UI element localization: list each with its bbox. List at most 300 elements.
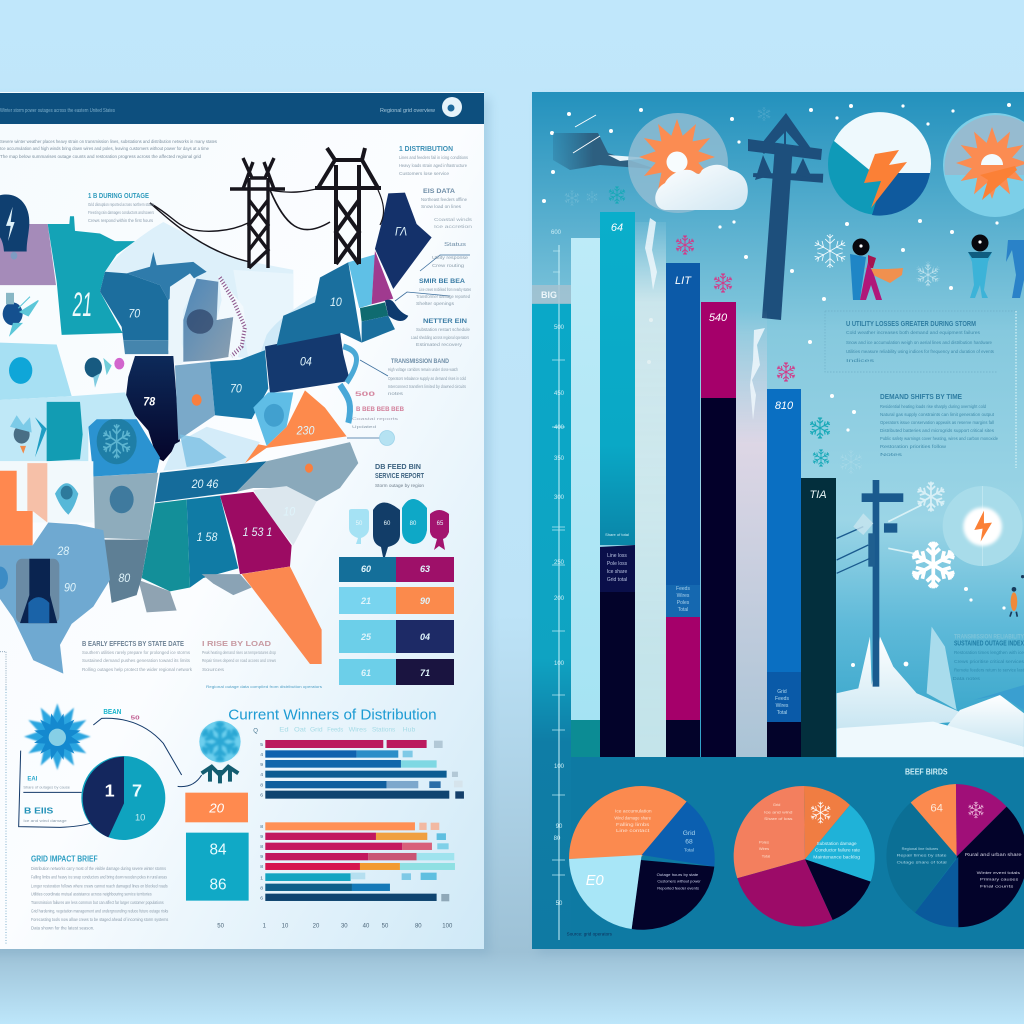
chart: pie one: 68 bbox=[685, 838, 693, 845]
box: teal bbox=[186, 833, 249, 901]
pie side labels: B EIIS bbox=[24, 806, 54, 815]
gap band 2 bbox=[736, 310, 767, 757]
snow texture on Kentucky bbox=[180, 434, 227, 467]
callout: New England notes: Shelter openings bbox=[416, 301, 454, 306]
state: Kentucky bbox=[163, 427, 260, 471]
chart legend row: Feeds bbox=[327, 728, 343, 734]
callout: pink note bbox=[352, 392, 405, 429]
callout: New England notes: Substation restart schedule bbox=[416, 327, 471, 332]
legend heading: DB FEED BIN bbox=[375, 464, 421, 471]
chart: pie: 1 bbox=[105, 781, 115, 801]
chart: pie: 10 bbox=[135, 813, 145, 823]
icon: snowflake large bbox=[910, 542, 957, 588]
chart legend row: Hub bbox=[403, 728, 416, 734]
text block: Florida notes bbox=[202, 641, 277, 672]
legend heading: Storm outage by region bbox=[375, 483, 424, 488]
chart: row markers: 8 bbox=[260, 824, 263, 830]
box: orange bbox=[185, 793, 248, 822]
text block: Gulf notes: Southern utilities rarely prepare for prolonged ice storms bbox=[82, 650, 191, 655]
Minnesota label: 21 bbox=[72, 285, 92, 323]
intro text block: Severe winter weather places heavy strain on transmission lines, substations and distribution networks in many states bbox=[0, 139, 218, 144]
chart: x axis labels: 1 bbox=[263, 923, 267, 929]
text block: Florida notes: I RISE BY LOAD bbox=[202, 641, 271, 648]
intro text block bbox=[0, 139, 218, 159]
box: teal: 86 bbox=[209, 876, 227, 893]
bar 3 bbox=[666, 263, 700, 757]
chart: pie three: Winter event totals bbox=[977, 870, 1020, 875]
icon: lightbulb with bolt bbox=[0, 195, 29, 260]
box: orange: 20 bbox=[208, 801, 225, 816]
pie side labels: EAI bbox=[27, 777, 38, 783]
icon: people group right bbox=[968, 234, 1024, 298]
state: Maine bbox=[375, 193, 432, 289]
callout: top right heading bbox=[399, 144, 469, 176]
left axis: 200 bbox=[554, 596, 565, 602]
chart: pie one: Line contact bbox=[616, 828, 650, 833]
state: New Hampshire bbox=[372, 251, 393, 304]
callout: pink note: Coastal reports bbox=[352, 416, 398, 421]
text block: scene note: Crews prioritise critical services bbox=[954, 659, 1024, 664]
text box: analysis: Cold weather increases both demand and equipment failures bbox=[846, 330, 981, 335]
chart: pie one: Ice accumulation bbox=[615, 809, 652, 814]
pies heading: BEEF BIRDS bbox=[905, 767, 948, 777]
chart legend row: Stations bbox=[372, 728, 395, 734]
chart: x axis labels bbox=[217, 923, 453, 929]
icon: drop pin bbox=[55, 483, 78, 515]
text block: summary: Utilities coordinate mutual assistance across neighbouring service territories bbox=[31, 892, 152, 897]
lower left corner box bbox=[0, 652, 6, 690]
New York label: 10 bbox=[330, 297, 342, 309]
state: Tennessee bbox=[155, 461, 267, 503]
Texas labels: 90 bbox=[64, 582, 76, 595]
chart: pie one: Outage hours by state bbox=[657, 872, 699, 877]
callout: top right heading: Heavy loads strain aged infrastructure bbox=[399, 163, 467, 168]
chart: pie two: Maintenance backlog bbox=[813, 854, 861, 859]
callout: pink note: 500 bbox=[355, 392, 376, 398]
text block: Florida notes: Peak heating demand rises as temperatures drop bbox=[202, 650, 276, 655]
chart: row markers: 4 bbox=[260, 772, 263, 778]
bar 6 bbox=[801, 478, 836, 757]
Arkansas label: 80 bbox=[118, 572, 131, 585]
bar 3: Poles bbox=[677, 600, 690, 606]
chart: row markers: 8 bbox=[260, 844, 263, 850]
power transmission towers and wires bbox=[150, 148, 384, 268]
left axis: 100 bbox=[554, 661, 565, 667]
bar 5: Feeds bbox=[775, 696, 789, 702]
chart legend row: Wires bbox=[349, 728, 367, 734]
state: South Carolina bbox=[253, 486, 317, 545]
callout: mid-Atlantic notes: TRANSMISSION BAND bbox=[391, 358, 449, 365]
icon: people group left bbox=[850, 238, 903, 300]
left axis: 450 bbox=[554, 391, 565, 397]
chart: pie bbox=[81, 756, 165, 840]
Wisconsin label: 70 bbox=[128, 308, 141, 321]
Pennsylvania label: 04 bbox=[300, 356, 312, 369]
state: Georgia bbox=[220, 492, 292, 574]
Georgia label: 1 53 1 bbox=[243, 526, 272, 539]
Texas labels: 28 bbox=[56, 545, 70, 558]
chart: pie three: Outage share of total bbox=[897, 859, 947, 864]
callout: New England notes: SMIR BE BEA bbox=[419, 278, 465, 285]
text block: summary: Longer restoration follows where crews cannot reach damaged lines on blocked roads bbox=[31, 883, 168, 888]
text block: regional notes: Operators issue conservation appeals as reserve margins fall bbox=[880, 420, 994, 425]
left axis: 350 bbox=[554, 456, 565, 462]
faint snowflakes bbox=[564, 107, 941, 474]
bar 2: 64 bbox=[611, 222, 623, 234]
chart: row markers: 8 bbox=[260, 864, 263, 870]
box: teal: 84 bbox=[209, 842, 227, 859]
chart: column bars bbox=[571, 212, 836, 757]
callout: Maine note: Coastal winds bbox=[434, 217, 472, 222]
callout: left of map heading: 1 B DURING OUTAGE bbox=[88, 191, 149, 200]
state: purple bbox=[0, 224, 56, 285]
icon: sun and bolt circle bbox=[943, 113, 1024, 217]
chart: row markers: 4 bbox=[260, 752, 263, 758]
state: Kansas bbox=[0, 392, 137, 461]
pie side labels: Share of outages by cause bbox=[23, 785, 70, 789]
chart: pie three: Primary causes bbox=[980, 877, 1018, 882]
text box: analysis: Indices bbox=[846, 358, 875, 363]
chart: x axis labels: 20 bbox=[313, 923, 320, 929]
legend table bbox=[339, 557, 454, 685]
callout: left of map heading: Grid disruption reported across northern states bbox=[88, 202, 155, 207]
upper peninsula bbox=[127, 252, 207, 300]
left axis bbox=[532, 230, 572, 940]
callout: Maine note: Northeast feeders offline bbox=[421, 197, 468, 202]
state: Minnesota bbox=[48, 216, 135, 335]
Maine label: ΓΛ bbox=[395, 226, 407, 239]
chart: x axis labels: 50 bbox=[382, 923, 389, 929]
state: Missouri bbox=[93, 473, 158, 540]
chart: row markers: 5 bbox=[260, 742, 263, 748]
text block: regional notes: Notes bbox=[880, 452, 903, 457]
state: Virginia bbox=[245, 390, 347, 463]
left axis: 90 bbox=[556, 824, 563, 830]
callout: left of map heading bbox=[88, 191, 155, 223]
map of the United States bbox=[0, 193, 432, 690]
Alabama label: 1 58 bbox=[197, 531, 218, 544]
state: Texas bbox=[0, 522, 110, 674]
bar 4 bbox=[701, 302, 736, 757]
left axis: 250 bbox=[554, 560, 565, 566]
text block: summary: Distribution networks carry most of the visible damage during severe winter storms bbox=[31, 866, 166, 871]
chart: pie one: E0 bbox=[586, 873, 604, 889]
balloon: navy: 60 bbox=[384, 521, 391, 527]
state: Louisiana bbox=[138, 580, 177, 612]
legend table: 61 bbox=[361, 668, 371, 678]
icon: snowflake white bbox=[813, 234, 847, 268]
state: teal square bbox=[47, 402, 83, 461]
chart: pie one: Falling limbs bbox=[616, 822, 649, 827]
callout: Maine note: Utility response bbox=[432, 255, 469, 260]
text block: regional notes: DEMAND SHIFTS BY TIME bbox=[880, 394, 962, 401]
callout: mid-Atlantic notes: High voltage corridors remain under close watch bbox=[388, 367, 459, 372]
icon: small figure bbox=[1010, 575, 1024, 617]
icon: lightning pie circle bbox=[828, 112, 931, 216]
state: Florida bbox=[242, 566, 322, 664]
text block: summary: Falling limbs and heavy ice snap conductors and bring down wooden poles in rural areas bbox=[31, 875, 167, 880]
icon: sun with cloud bbox=[628, 113, 748, 213]
chart: pie three: Regional line failures bbox=[902, 846, 938, 851]
left axis: 80 bbox=[554, 836, 561, 842]
callout: New England notes: Load shedding across regional operators bbox=[411, 335, 469, 340]
chart: pie one: Customers without power bbox=[657, 879, 701, 884]
balloon: magenta: 65 bbox=[437, 521, 444, 527]
chart: row markers: 6 bbox=[260, 793, 263, 799]
text block: Florida notes: Repair times depend on road access and crews bbox=[202, 658, 277, 663]
callout node bbox=[380, 430, 394, 446]
state: Illinois bbox=[125, 356, 180, 461]
chart: pie three: Final counts bbox=[980, 883, 1013, 888]
icon: bulb flower 1 bbox=[3, 293, 38, 335]
legend table: 63 bbox=[420, 564, 430, 574]
icon: bolt in circle bbox=[943, 486, 1023, 566]
callout lines bbox=[347, 255, 470, 438]
chart: pie one bbox=[569, 786, 715, 930]
callout: left of map heading: Crews respond within the first hours bbox=[88, 218, 154, 223]
legend table: 21 bbox=[360, 596, 371, 606]
winter scene bbox=[567, 480, 1024, 938]
chart: pie one: Reported feeder events bbox=[657, 885, 699, 890]
left axis: 300 bbox=[554, 495, 565, 501]
Ohio label: 70 bbox=[230, 383, 242, 396]
intro text block: The map below summarises outage counts and restoration progress across the affected regional grid bbox=[0, 154, 201, 159]
gap band 1 bbox=[635, 222, 666, 757]
pie label: heading: BEAN bbox=[103, 707, 122, 716]
bar 2 bbox=[600, 212, 635, 757]
chart: row markers: 8 bbox=[260, 783, 263, 789]
callout: top right heading: Customers lose service bbox=[399, 171, 450, 176]
text box: analysis: Utilities measure reliability using indices for frequency and duration of events bbox=[846, 349, 995, 354]
callout: pink note: B BEB BEB BEB bbox=[356, 407, 405, 413]
chart: row markers: 1 bbox=[260, 875, 263, 881]
chart: pie two: Ice and wind bbox=[764, 809, 792, 814]
text block: Florida notes: Sources bbox=[202, 667, 225, 672]
legend table: 04 bbox=[420, 632, 430, 642]
bar 5: Wires bbox=[776, 703, 789, 709]
chart: pie two: Grid bbox=[773, 802, 780, 807]
callout: Maine note bbox=[421, 188, 473, 268]
icon: utility pole silhouette bbox=[748, 113, 823, 320]
left axis: 500 bbox=[554, 325, 565, 331]
text block: regional notes: Residential heating loads rise sharply during overnight cold bbox=[880, 404, 986, 409]
chart: row markers: 9 bbox=[260, 834, 263, 840]
Virginia label: 230 bbox=[296, 425, 315, 438]
chart: row markers: 6 bbox=[260, 895, 263, 901]
chart: pie two: Share of loss bbox=[764, 816, 792, 821]
panel: left map and distribution poster bbox=[0, 92, 484, 949]
chart: bars group one bbox=[265, 740, 464, 799]
state: Vermont bbox=[348, 255, 375, 308]
state: Indiana bbox=[175, 362, 215, 440]
chart legend row bbox=[253, 728, 416, 735]
text block: Gulf notes: B EARLY EFFECTS BY STATE DATE bbox=[82, 641, 184, 648]
title: Current Winners of Distribution bbox=[228, 707, 437, 723]
state: New York bbox=[277, 262, 362, 346]
left axis: 600 bbox=[551, 230, 562, 236]
Tennessee label: 20 46 bbox=[191, 478, 219, 491]
snow mountains and ground bbox=[837, 627, 1024, 757]
icon: storm cloud and lightning bbox=[553, 115, 653, 170]
left axis: 400 bbox=[554, 425, 565, 431]
bar 5: Grid bbox=[777, 689, 787, 695]
connector lines bbox=[19, 718, 202, 827]
chart legend row: Q bbox=[253, 729, 258, 735]
chart: pie three: Repair times by state bbox=[897, 853, 948, 858]
callout: top right heading: Lines and feeders fail in icing conditions bbox=[399, 155, 469, 160]
snow dots bbox=[542, 103, 1024, 667]
callout: mid-Atlantic notes bbox=[388, 358, 467, 396]
chart: row markers: 8 bbox=[260, 885, 263, 891]
state: Arkansas bbox=[103, 540, 148, 603]
state: Connecticut bbox=[362, 316, 395, 343]
text block: regional notes bbox=[880, 394, 998, 457]
callout: New England notes: NETTER EIN bbox=[423, 318, 467, 325]
bar 5 bbox=[767, 389, 801, 757]
icon: ice flower bbox=[199, 721, 241, 783]
chart: row markers: 9 bbox=[260, 762, 263, 768]
callout: New England notes bbox=[411, 278, 471, 347]
state: Massachusetts bbox=[360, 302, 388, 322]
state: Ohio bbox=[210, 350, 268, 419]
bar 2: Pole loss bbox=[607, 561, 628, 567]
legend table: 60 bbox=[361, 564, 371, 574]
bar 5: Total bbox=[777, 710, 787, 716]
chart: pie one: Grid bbox=[683, 830, 696, 837]
text block: summary: GRID IMPACT BRIEF bbox=[31, 854, 98, 863]
bar 2: Share of total bbox=[605, 532, 629, 537]
left axis strip bbox=[532, 303, 571, 949]
chart: pie three: Rural and urban share bbox=[965, 852, 1022, 857]
state: Mississippi bbox=[142, 499, 190, 591]
chart: x axis labels: 100 bbox=[442, 923, 453, 929]
text block: summary: Grid hardening, vegetation management and undergrounding reduce future outage risks bbox=[31, 908, 168, 913]
marker bbox=[305, 464, 313, 473]
text block: summary: Data shown for the latest season. bbox=[31, 926, 94, 931]
header bar: Winter storm power outages across the eastern United States bbox=[0, 108, 115, 114]
chart: bars group two bbox=[265, 822, 455, 901]
chart: pie: 7 bbox=[132, 781, 142, 801]
text box: analysis: Snow and ice accumulation weigh on aerial lines and distribution hardware bbox=[846, 340, 992, 345]
callout: Maine note: Snow load on lines bbox=[421, 204, 461, 209]
text block: scene note bbox=[953, 633, 1024, 681]
text block: regional notes: Distributed batteries and microgrids support critical sites bbox=[880, 428, 995, 433]
state: pink bbox=[27, 463, 47, 522]
callout: pink note: Updated bbox=[352, 424, 376, 429]
left axis: 100 bbox=[554, 764, 565, 770]
icon: bulb flower 3 bbox=[10, 415, 47, 457]
callout: New England notes: Estimated recovery bbox=[416, 342, 463, 347]
bar 3: LIT bbox=[675, 275, 692, 287]
callout: Maine note: EIS DATA bbox=[423, 188, 455, 195]
callout: Maine note: Crew routing bbox=[432, 263, 465, 268]
legend table: 71 bbox=[420, 668, 430, 678]
icon: blue snowflake bbox=[24, 703, 91, 770]
icon: utility pole with wires bbox=[837, 480, 922, 687]
text block: summary: Transmission failures are less common but can affect far larger customer populations bbox=[31, 900, 164, 905]
bar 3: Wires bbox=[677, 593, 690, 599]
lower left dashboard bbox=[6, 687, 464, 945]
legend heading: SERVICE REPORT bbox=[375, 473, 425, 480]
Texas labels bbox=[56, 545, 76, 595]
chart: x axis labels: 50 bbox=[217, 923, 225, 929]
state: Pennsylvania bbox=[265, 331, 350, 393]
left axis: 50 bbox=[556, 901, 563, 907]
state: white block bbox=[0, 461, 93, 522]
icon: teal crystals bbox=[608, 186, 831, 467]
panel: right climate chart poster bbox=[532, 92, 1024, 949]
marker bbox=[192, 394, 202, 406]
callout: left of map heading: Freezing rain damages conductors and towers bbox=[88, 210, 155, 215]
intro text block: Ice accumulation and high winds bring down wires and poles, leaving customers without power for days at a time bbox=[0, 146, 209, 151]
callout: mid-Atlantic notes: Operators rebalance supply as demand rises in cold bbox=[388, 376, 467, 381]
bar 2: Line loss bbox=[607, 553, 627, 559]
chart: x axis labels: 80 bbox=[415, 923, 422, 929]
callout: mid-Atlantic notes: notes bbox=[388, 391, 403, 396]
legend heading bbox=[375, 464, 425, 488]
bar 3: Total bbox=[678, 607, 688, 613]
chart: x axis labels: 10 bbox=[282, 923, 289, 929]
icon: snowflake faint bbox=[917, 264, 939, 286]
bar 6: TIA bbox=[809, 489, 827, 501]
header bar: Regional grid overview bbox=[380, 108, 435, 114]
callout: Maine note: Status bbox=[444, 242, 467, 248]
bar 4: 540 bbox=[709, 312, 728, 324]
state: Iowa bbox=[88, 419, 160, 477]
chart: x axis labels: 40 bbox=[363, 923, 370, 929]
lower band bbox=[532, 757, 1024, 949]
chart: row markers bbox=[260, 742, 263, 901]
caption strip: Regional outage data compiled from distribution operators bbox=[206, 685, 322, 689]
header bar bbox=[0, 93, 484, 124]
chart: pie two: Total bbox=[762, 854, 770, 859]
callout: New England notes: Transformer damage reported bbox=[416, 294, 471, 299]
bar 2: Grid total bbox=[607, 577, 627, 583]
badge: sunburst bbox=[97, 418, 137, 464]
state: Alabama bbox=[187, 496, 238, 588]
state: Florida panhandle bbox=[202, 574, 252, 595]
chart: pie two: Wires bbox=[759, 846, 769, 851]
text block: summary: Forecasting tools now allow crews to be staged ahead of incoming storm systems bbox=[31, 917, 168, 922]
chart: pie one: Total bbox=[684, 848, 694, 853]
badge on Missouri bbox=[110, 486, 134, 513]
text block: regional notes: Public safety warnings cover heating, wires and carbon monoxide bbox=[880, 436, 998, 441]
pie side labels: Ice and wind damage bbox=[23, 819, 67, 823]
icon: dark dam in Texas bbox=[16, 559, 59, 623]
balloon: teal: 80 bbox=[410, 521, 417, 527]
chart legend row: Grid bbox=[310, 728, 323, 734]
chart: pie two: Poles bbox=[759, 839, 769, 844]
state: Wisconsin bbox=[100, 272, 168, 354]
callout: mid-Atlantic notes: Interconnect transfers limited by downed circuits bbox=[388, 384, 466, 389]
dotted frame line bbox=[4, 687, 7, 945]
chart: x axis labels: 30 bbox=[341, 923, 348, 929]
text block: regional notes: Natural gas supply constraints can limit generation output bbox=[880, 412, 995, 417]
text block: Gulf notes: Rolling outages help protect the wider regional network bbox=[82, 667, 193, 672]
icon: magenta crystals above bars bbox=[675, 235, 796, 382]
bar 2: Ice share bbox=[607, 569, 627, 575]
blue ring bbox=[0, 566, 8, 589]
legend table: 90 bbox=[420, 596, 430, 606]
state: West Virginia bbox=[253, 392, 293, 446]
icon: bulb flower 2 bbox=[85, 358, 124, 388]
chart: pie three: 64 bbox=[930, 803, 943, 815]
chart: pie two: Substation damage bbox=[817, 841, 857, 846]
legend table: 25 bbox=[360, 632, 372, 642]
source strip: Source: grid operators bbox=[567, 932, 612, 938]
badge: Nebraska bbox=[9, 357, 32, 384]
chart: pie two: Conductor failure rate bbox=[815, 848, 861, 853]
